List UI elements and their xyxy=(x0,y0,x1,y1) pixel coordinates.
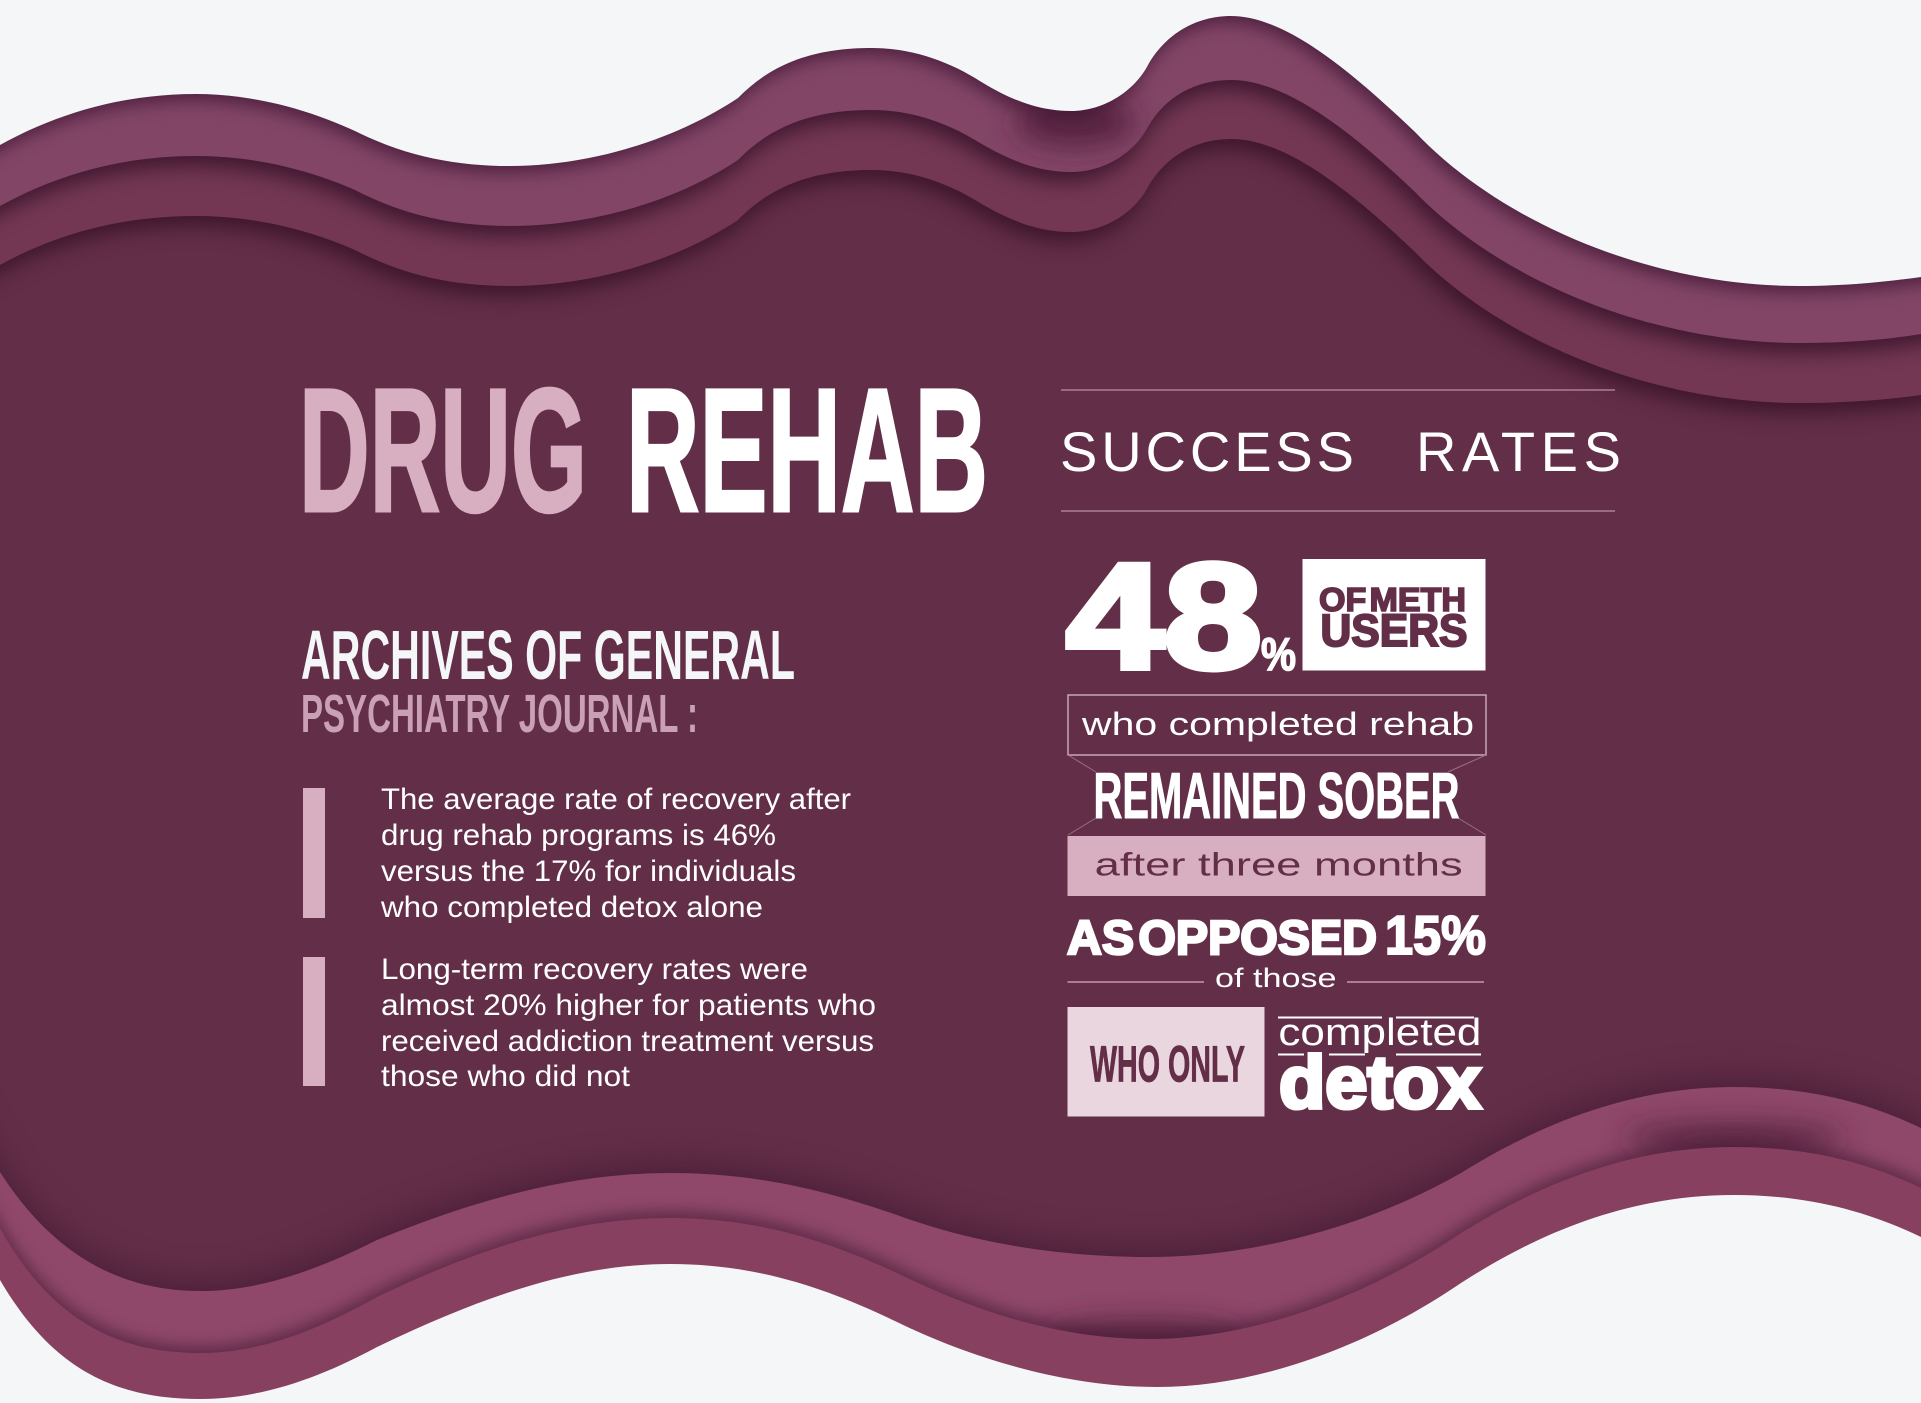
heading: success rates xyxy=(1060,390,1621,511)
banner: remained sober xyxy=(1068,755,1486,835)
title: DRUG REHAB: REHAB xyxy=(626,353,988,549)
shading on inner layer xyxy=(1045,1124,1844,1349)
top wave layer: outer page edge xyxy=(0,0,1921,286)
icon: accent bar 1 xyxy=(303,788,325,918)
top paper-cut waves xyxy=(0,0,1921,403)
label: of meth users xyxy=(1319,581,1468,656)
divider text: of those: of those xyxy=(1215,963,1336,993)
top wave layer: middle xyxy=(0,0,1921,343)
bottom wave layer: outer page edge xyxy=(0,1195,1921,1403)
text block: average rate of recovery xyxy=(303,783,851,924)
label: of meth users: USERS xyxy=(1320,605,1468,656)
heading: success rates: SUCCESS xyxy=(1060,420,1354,483)
stat: as opposed 15% xyxy=(1067,904,1486,966)
text block: long-term recovery rates xyxy=(303,953,876,1093)
banner: after three months: after three months xyxy=(1095,846,1463,882)
bottom wave layer: inner xyxy=(0,1087,1921,1403)
paragraph 2: Long-term recovery rates were xyxy=(381,953,808,986)
label: of meth users: OF METH xyxy=(1319,581,1466,618)
title: DRUG REHAB: DRUG xyxy=(299,353,587,549)
paragraph 2: almost 20% higher for patients who xyxy=(381,989,876,1022)
paragraph 2: received addiction treatment versus xyxy=(381,1025,874,1058)
completed word with rules: completed xyxy=(1278,1012,1481,1054)
bottom wave layer: middle xyxy=(0,1147,1921,1403)
stat: 48% of meth users xyxy=(1066,532,1486,700)
paragraph 1 xyxy=(380,783,851,924)
stat: as opposed 15%: 15% xyxy=(1385,904,1486,966)
paragraph 1: drug rehab programs is 46% xyxy=(381,819,776,852)
heading: Archives of General Psychiatry Journal: PSYCHIATRY JOURNAL : xyxy=(301,684,698,744)
top wave layer: inner xyxy=(0,0,1921,403)
banner: after three months xyxy=(1068,836,1486,896)
paragraph 1: The average rate of recovery after xyxy=(381,783,851,816)
shading on middle layer xyxy=(1015,98,1135,146)
label: completed detox xyxy=(1278,1012,1481,1124)
heading: Archives of General Psychiatry Journal: ARCHIVES OF GENERAL xyxy=(301,616,795,694)
stat: as opposed 15%: AS OPPOSED xyxy=(1067,912,1377,965)
paragraph 1: who completed detox alone xyxy=(380,891,763,924)
white label box xyxy=(1302,559,1486,670)
bottom paper-cut waves xyxy=(0,1087,1921,1403)
banner: who completed rehab: who completed rehab xyxy=(1081,706,1474,742)
paragraph 2 xyxy=(381,953,876,1093)
box: who only xyxy=(1068,1007,1264,1116)
box: who only: WHO ONLY xyxy=(1090,1036,1245,1092)
heading: Archives of General Psychiatry Journal xyxy=(301,616,795,744)
number 48%: % xyxy=(1261,628,1296,680)
heading: success rates: RATES xyxy=(1416,420,1621,483)
detox word: detox xyxy=(1279,1041,1481,1124)
banner: who completed rehab xyxy=(1068,695,1486,755)
banner: remained sober: REMAINED SOBER xyxy=(1094,759,1460,832)
paragraph 1: versus the 17% for individuals xyxy=(381,855,796,888)
paragraph 2: those who did not xyxy=(381,1060,631,1093)
number 48%: 48 xyxy=(1066,532,1262,700)
icon: accent bar 2 xyxy=(303,957,325,1086)
